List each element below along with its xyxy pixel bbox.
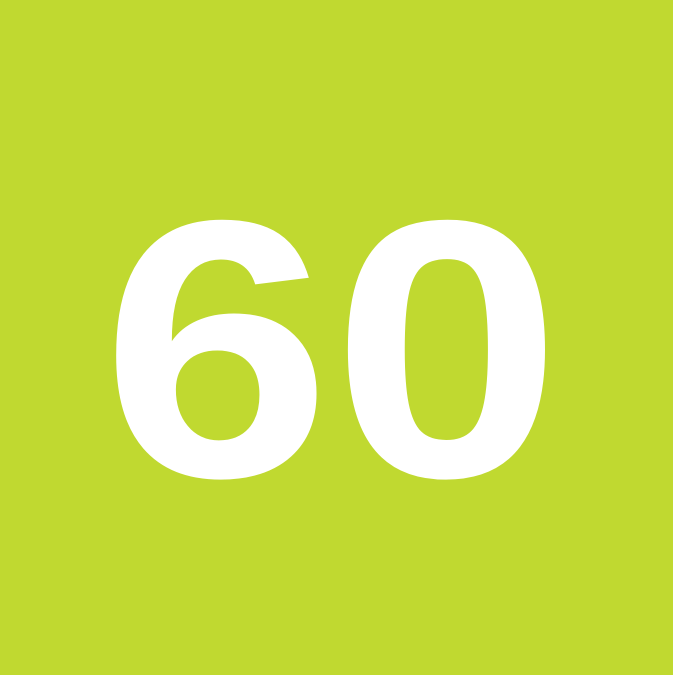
big number 60: 60	[101, 144, 562, 554]
